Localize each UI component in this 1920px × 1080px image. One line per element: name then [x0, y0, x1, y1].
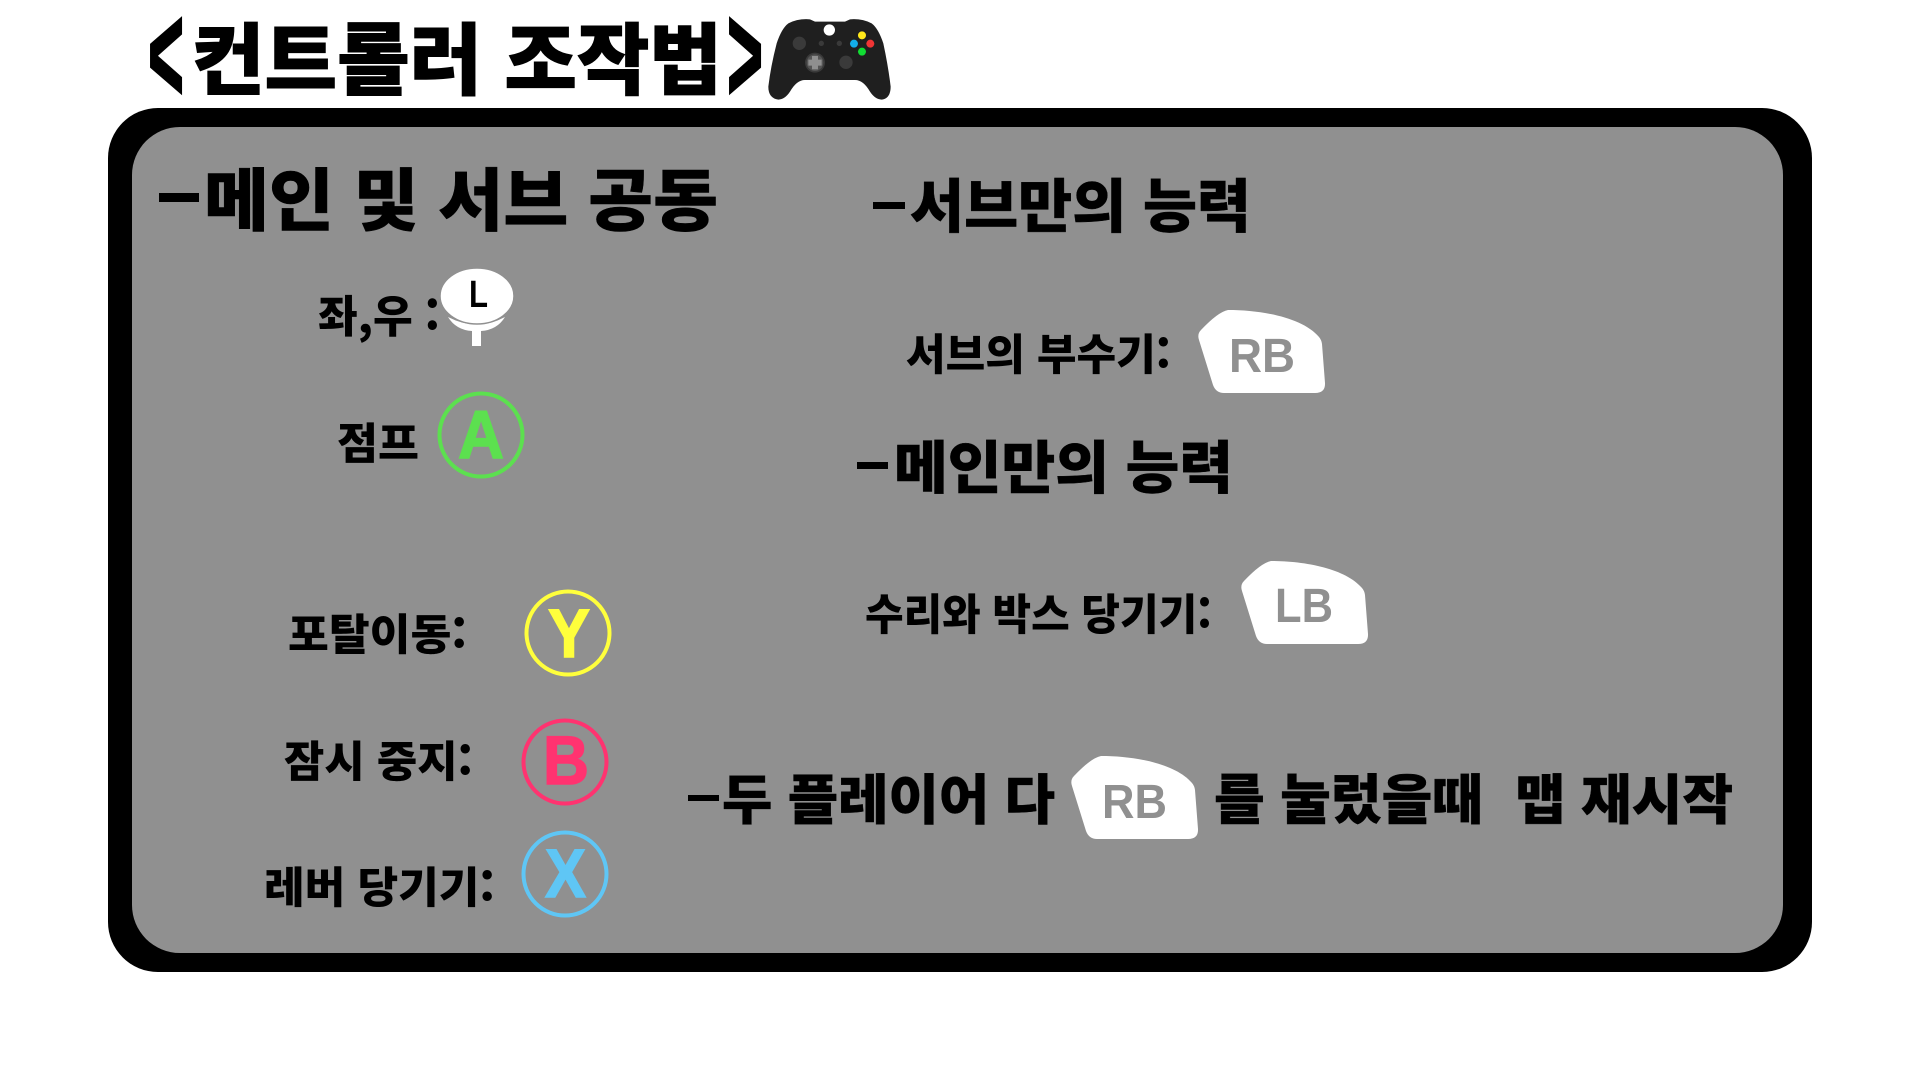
- icon: RB bumper: [1198, 310, 1325, 393]
- heading: main-only ability: 메인만의 능력: [894, 423, 1233, 505]
- heading: sub-only ability: 서브만의 능력: [910, 160, 1251, 244]
- title: 컨트롤러 조작법: [192, 0, 722, 111]
- label: pause: 잠시 중지:: [284, 728, 473, 790]
- label: portal move: 포탈이동:: [288, 601, 467, 663]
- icon: L stick: L: [469, 274, 488, 316]
- heading: common controls: 메인 및 서브 공동: [204, 146, 718, 245]
- icon: B button: [524, 720, 606, 804]
- icon: A button: [440, 394, 522, 476]
- note: both players restart: 를 눌렀을때: [1214, 756, 1483, 835]
- icon: L stick: [440, 268, 514, 346]
- note: both players restart: [688, 756, 1733, 839]
- label: left/right: 좌,우 :: [318, 281, 440, 345]
- panel: controls frame: [108, 108, 1812, 972]
- icon: X button: X: [545, 835, 586, 912]
- note: both players restart: RB: [1102, 776, 1167, 829]
- label: repair and pull box: 수리와 박스 당기기:: [865, 581, 1212, 643]
- icon: A button: A: [458, 397, 504, 473]
- icon: X button: [524, 832, 606, 916]
- note: both players restart: 맵 재시작: [1515, 756, 1733, 835]
- icon: LB bumper: LB: [1275, 580, 1333, 633]
- icon: LB bumper: [1241, 561, 1368, 644]
- icon: Y button: [526, 592, 610, 674]
- icon: B button: B: [543, 722, 589, 799]
- label: jump: 점프: [337, 410, 419, 472]
- icon: RB bumper: RB: [1229, 330, 1295, 383]
- note: both players restart: 두 플레이어 다: [722, 756, 1055, 835]
- icon: game controller: [768, 19, 891, 100]
- label: sub smash: 서브의 부수기:: [906, 321, 1171, 383]
- icon: Y button: Y: [548, 595, 590, 672]
- label: pull lever: 레버 당기기:: [264, 854, 495, 916]
